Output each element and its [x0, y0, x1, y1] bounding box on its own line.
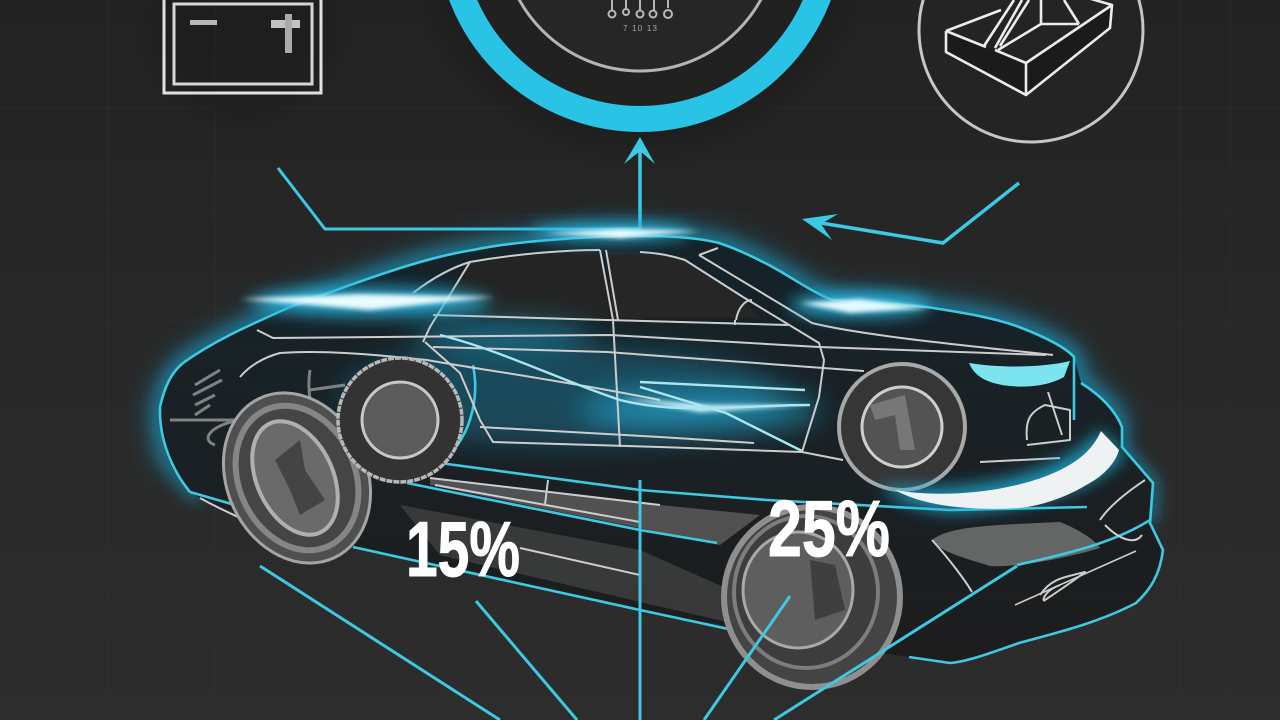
car illustration	[159, 223, 1163, 687]
rear detail marks	[170, 370, 345, 445]
icon: chassis box in circle	[919, 0, 1143, 142]
icon: central circuit dial	[400, 0, 880, 172]
grey body lines	[200, 248, 1145, 605]
cabin windows	[436, 250, 610, 318]
stat: 25%: 25%	[768, 484, 890, 573]
lower panel	[400, 505, 740, 625]
hood grey panel	[932, 522, 1100, 566]
lower side skirt panel	[430, 478, 760, 545]
rear glow inside	[340, 321, 820, 445]
wheel: rear upper	[338, 358, 462, 482]
connector lines at bottom	[260, 480, 1017, 720]
wheel: front upper	[839, 364, 965, 490]
car body fill	[160, 236, 1163, 663]
wheel: rear lower	[196, 369, 398, 587]
arrow: up to central dial	[624, 137, 655, 229]
pin labels: 7 10 13	[623, 24, 658, 33]
wheel: front lower	[724, 507, 900, 687]
arrow: from right circle	[802, 183, 1019, 243]
flowing side light lines	[440, 335, 810, 451]
light streaks	[240, 223, 930, 412]
circuit pins	[608, 0, 672, 18]
white swoosh on bumper	[880, 430, 1125, 512]
arrow: left connector to battery	[278, 168, 640, 229]
cyan lower body lines	[190, 365, 1150, 648]
car outer glow	[159, 236, 1153, 523]
headlight	[969, 361, 1070, 387]
cyan outline	[160, 236, 1163, 663]
icon: battery	[133, 0, 353, 138]
stat: 15%: 15%	[406, 505, 520, 593]
